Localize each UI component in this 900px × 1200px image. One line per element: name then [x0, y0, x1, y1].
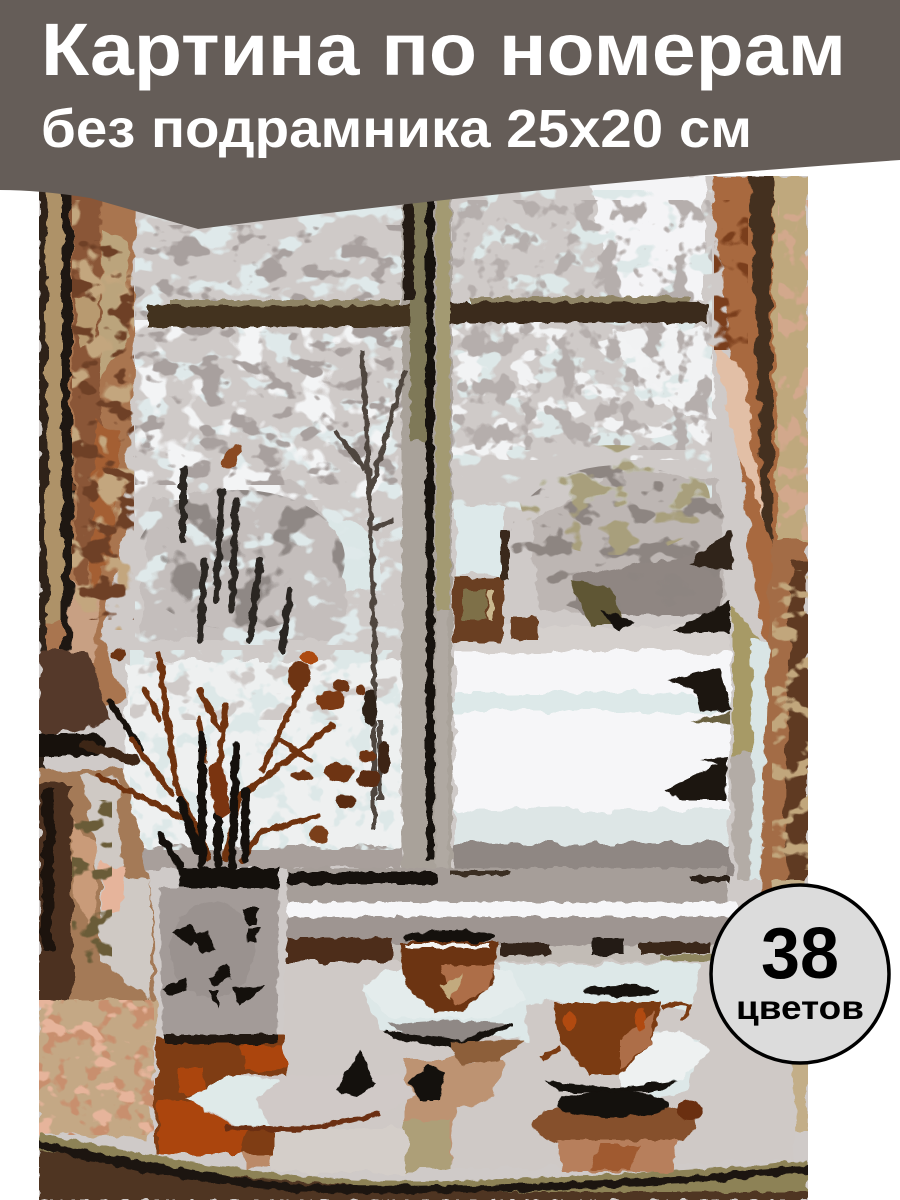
badge number: 38 [761, 914, 839, 994]
black shapes on table [336, 1050, 445, 1100]
plant leaves [110, 649, 390, 844]
title: Картина по номерам [41, 8, 846, 91]
bare tree outside [335, 350, 405, 830]
table edge [39, 1133, 808, 1200]
badge: number of colours [711, 885, 889, 1063]
grey paint patches [135, 225, 405, 485]
plant branches [99, 654, 332, 865]
conifer branches [665, 530, 733, 800]
snowy view through window [126, 176, 730, 877]
table top [156, 962, 795, 1175]
painting: winter window with cups [39, 176, 808, 1200]
right curtain [712, 176, 808, 1130]
subtitle: без подрамника 25х20 см [41, 99, 752, 159]
window frame [148, 190, 708, 875]
cup two [533, 985, 710, 1172]
house and outbuilding [453, 530, 635, 642]
plant upper stems [183, 450, 290, 650]
cup one [362, 930, 525, 1066]
dark diagonal at left [39, 702, 142, 760]
left curtain [39, 176, 156, 1140]
white paint patches [135, 320, 405, 500]
badge label: цветов [736, 989, 864, 1026]
window sill [287, 868, 737, 965]
header banner [0, 0, 900, 229]
curtain mottling [39, 200, 808, 1135]
vase [159, 868, 279, 1044]
plate on table [186, 1075, 416, 1132]
pale blue paint patches [135, 205, 405, 645]
